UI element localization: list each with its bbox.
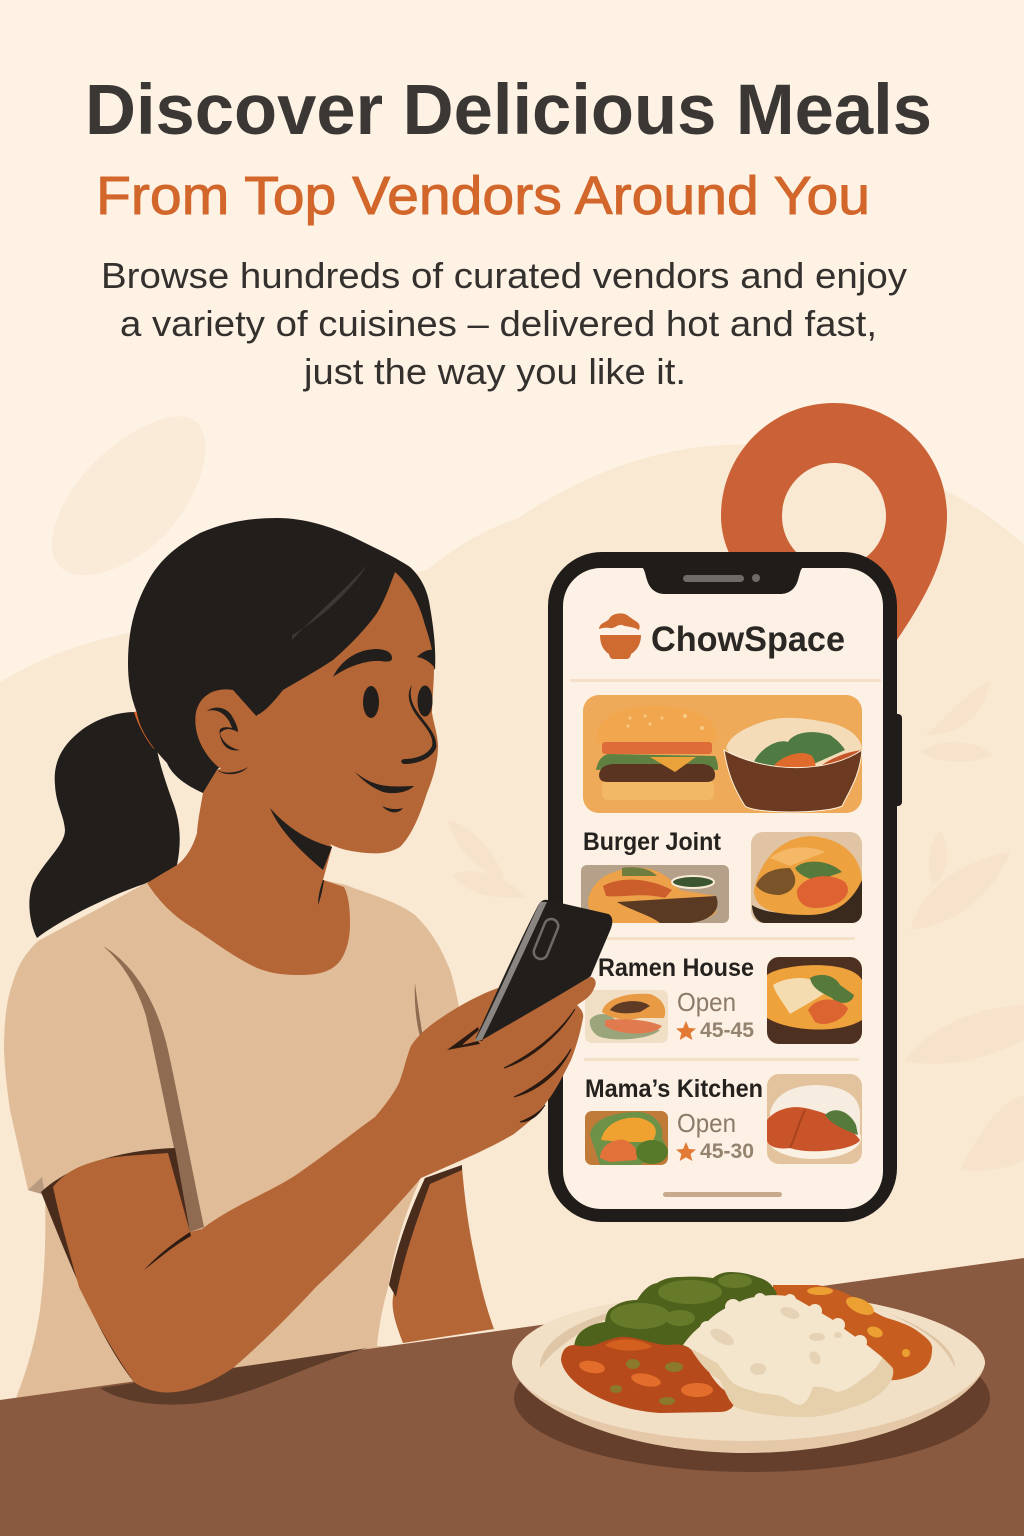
hair tie [134,711,157,749]
food thumbnail [581,865,729,923]
vendor: Ramen House [585,954,862,1044]
brand name: ChowSpace [651,620,845,659]
eye right [418,686,432,716]
left curry [561,1337,735,1413]
vendor: Burger Joint [581,828,862,923]
phone side button [892,714,902,806]
status: Open [677,1108,736,1138]
shirt right crease [415,983,423,1039]
neck crease [318,880,324,905]
title: Discover Delicious Meals [85,71,932,150]
phone notch [640,566,805,594]
sleeve hem tip [28,1177,45,1195]
icon: star [676,1021,696,1040]
woman [0,518,1024,1536]
background hill [0,445,1024,1536]
bowl with food [724,718,862,812]
rice light top [683,1295,882,1405]
vendor name: Burger Joint [583,828,722,856]
vendor name: Ramen House [598,954,754,982]
eyebrow right [417,650,435,668]
speaker [683,575,744,582]
ponytail [29,712,180,938]
right curry [770,1285,932,1380]
right arm behind [393,1168,494,1343]
hair [128,518,435,793]
icon: star [676,1142,696,1161]
plate shadow [514,1324,990,1472]
food thumbnail [751,832,862,923]
ear [195,689,258,774]
burger [596,706,718,782]
face [217,572,438,853]
finger creases [447,1009,575,1122]
plate inner rim [540,1305,955,1368]
rice [683,1293,893,1417]
hero food card [583,695,862,813]
rating: 45-45 [700,1019,754,1042]
icon: location pin [721,403,947,650]
phone [548,552,902,1222]
description text: just the way you like it. [303,351,686,392]
thumb [482,977,596,1047]
description text [101,255,907,392]
plate underside [512,1292,985,1453]
icon: ChowSpace bowl logo [599,613,641,659]
food thumbnail [585,1111,668,1165]
food thumbnail [767,957,862,1044]
shirt [4,880,465,1398]
vendor: Mama's Kitchen [585,1074,862,1165]
eyebrow left [333,649,392,677]
table [0,1258,1024,1536]
eye left [363,686,379,718]
nose [401,685,436,764]
phone body [548,552,897,1222]
hair highlight [292,565,367,640]
neck and chest [147,770,350,975]
lower lip [382,806,403,812]
plate [512,1292,985,1441]
handheld phone [475,902,610,1041]
description text: a variety of cuisines – delivered hot and fast, [120,303,877,344]
right sleeve shadow [389,1165,462,1297]
background leaf sprigs [448,680,1024,1171]
camera [752,574,760,582]
food thumbnail [585,990,668,1043]
rice shaded base [690,1330,893,1417]
food thumbnail [767,1074,862,1164]
rating: 45-30 [700,1140,754,1163]
vendor name: Mama’s Kitchen [585,1075,763,1103]
upper arm [53,977,595,1393]
smile [355,772,414,793]
subtitle: From Top Vendors Around You [96,166,870,226]
elbow crease [144,1232,191,1270]
greens [574,1272,777,1352]
status: Open [677,987,736,1017]
sleeve crease shadow [103,946,204,1232]
elbow shadow on table [100,1348,368,1405]
phone screen [563,568,883,1209]
background brush blob [52,416,205,575]
home indicator [663,1192,782,1197]
sleeve dark edge [41,1148,190,1382]
jaw shadow [270,808,332,870]
arm and hand [41,902,610,1393]
plate of food [512,1272,990,1472]
description text: Browse hundreds of curated vendors and enjoy [101,255,907,296]
